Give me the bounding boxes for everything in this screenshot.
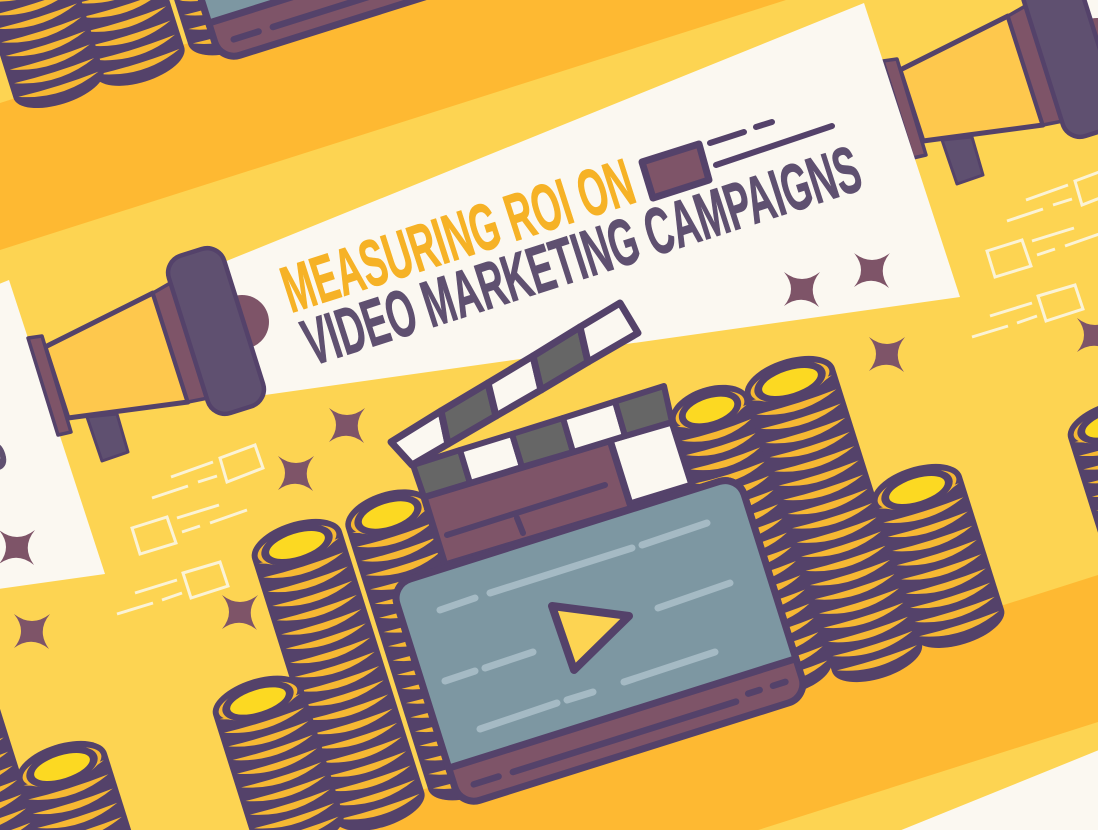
speed line rectangles xyxy=(117,445,263,614)
icon: megaphone xyxy=(28,244,269,461)
coin stacks xyxy=(207,346,1010,830)
orange band: top xyxy=(0,0,786,250)
icon: small video card xyxy=(642,122,832,198)
panel: white title banner xyxy=(224,3,960,395)
icon: clapperboard xyxy=(391,303,692,565)
player body xyxy=(391,476,808,806)
coin stack: back right xyxy=(664,376,838,704)
clapper body xyxy=(424,422,692,565)
screen caption lines xyxy=(440,523,730,729)
coin stack: short left xyxy=(207,666,349,830)
heading: measuring roi on: MEASURING ROI ON xyxy=(273,144,643,326)
coin stack: short right xyxy=(865,454,1010,658)
repeated scene copy: bottom xyxy=(268,748,1098,830)
orange band: bottom xyxy=(0,575,1098,830)
coin stack: tall right xyxy=(738,346,928,692)
repeated scene copy: left xyxy=(0,280,155,830)
coin stack: back left xyxy=(339,480,519,810)
title text block xyxy=(273,131,869,379)
decorative stars xyxy=(222,253,905,630)
clapper lower striped bar xyxy=(413,386,672,497)
play button xyxy=(552,606,629,670)
repeated scene copy: right xyxy=(883,0,1098,586)
repeated scene copy: top xyxy=(0,0,770,118)
clapper upper stick xyxy=(391,303,638,465)
coin stack: tall left xyxy=(245,509,431,830)
icon: video player xyxy=(391,476,808,806)
